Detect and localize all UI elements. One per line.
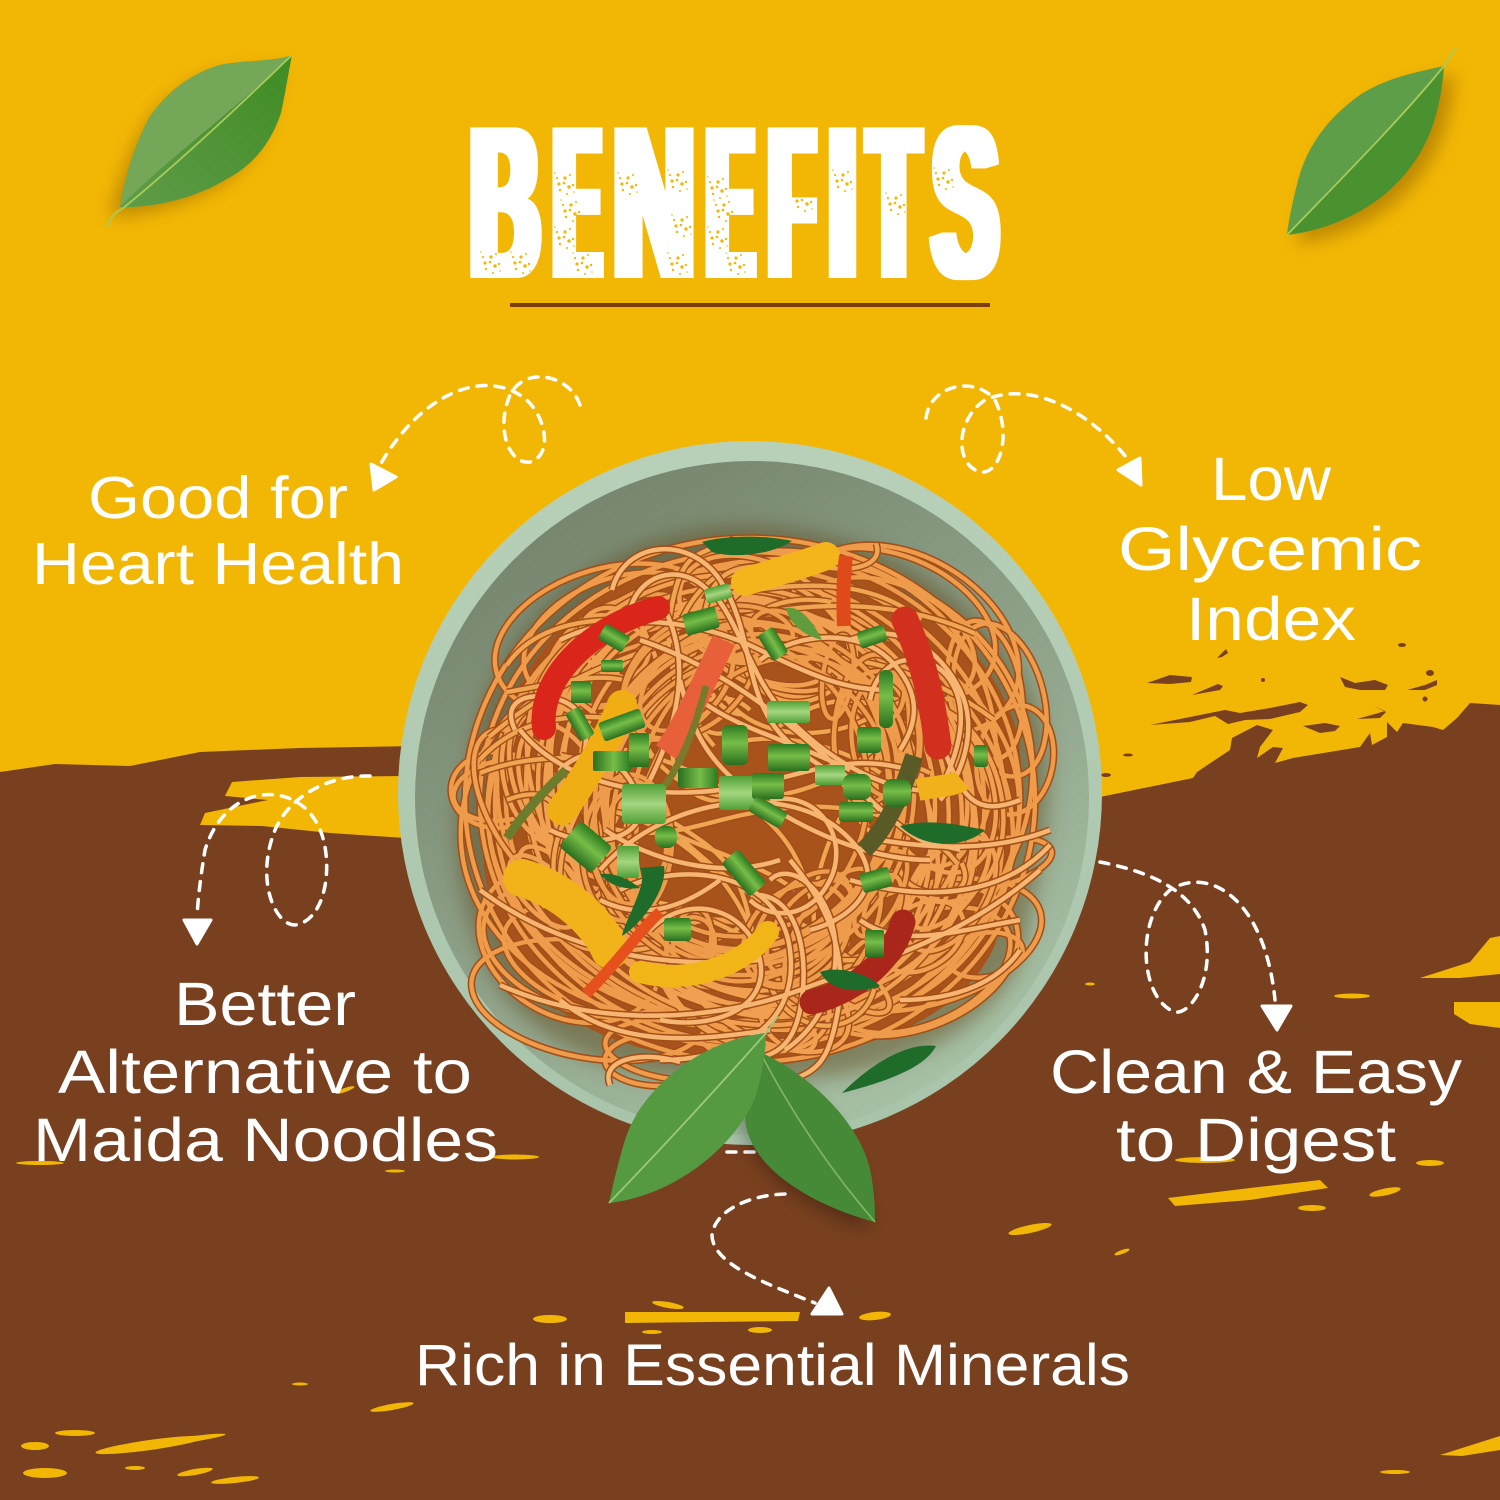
label: Good for Heart Health [32,465,404,597]
vegetables: green onions [559,583,988,957]
brown splashes on yellow [1101,643,1437,777]
bowl [398,441,1102,1145]
label: Better Alternative to Maida Noodles: Better [174,970,356,1038]
label: Low Glycemic Index: Low [1211,445,1332,513]
label: Better Alternative to Maida Noodles: Maida Noodles [33,1106,498,1174]
title: BENEFITS: T [869,81,918,323]
label: Rich in Essential Minerals: Rich in Essential Minerals [415,1333,1130,1398]
label: Better Alternative to Maida Noodles: Alternative to [58,1038,472,1106]
background: brown brush area [0,703,1500,1500]
title: BENEFITS: E [708,81,752,323]
label: Good for Heart Health: Heart Health [32,531,404,597]
arrow: to Good for Heart Health [371,377,580,490]
vegetables: herb leaves [600,537,985,1093]
label: Low Glycemic Index [1118,445,1422,653]
label: Low Glycemic Index: Index [1186,585,1356,653]
arrow: to Low Glycemic Index [926,386,1141,485]
noodles [398,432,1130,1164]
label: Clean and Easy to Digest: Clean & Easy [1050,1038,1463,1106]
arrow: to Better Alternative [184,776,370,944]
label: Low Glycemic Index: Glycemic [1118,515,1422,583]
yellow brush streak left [200,776,405,838]
title: BENEFITS [471,81,998,323]
arrow: to Rich in Essential Minerals [712,1152,842,1314]
label: Good for Heart Health: Good for [88,465,348,531]
yellow splashes on brown [16,936,1500,1485]
title: BENEFITS: I [830,81,856,323]
title: BENEFITS: E [555,81,600,323]
label: Better Alternative to Maida Noodles [33,970,498,1174]
title: BENEFITS: F [770,81,814,323]
label: Clean and Easy to Digest [1050,1038,1463,1174]
text: S [933,81,998,323]
vegetables: peppers [507,556,962,1002]
title: BENEFITS: B [471,81,539,323]
leaf: top left [107,55,292,227]
title: BENEFITS: N [614,81,694,323]
title underline [510,303,990,307]
arrow: to Clean and Easy to Digest [1100,862,1291,1030]
label: Clean and Easy to Digest: to Digest [1116,1106,1396,1174]
leaf: top right [1287,48,1456,243]
leaves: bottom garnish [609,1016,875,1228]
